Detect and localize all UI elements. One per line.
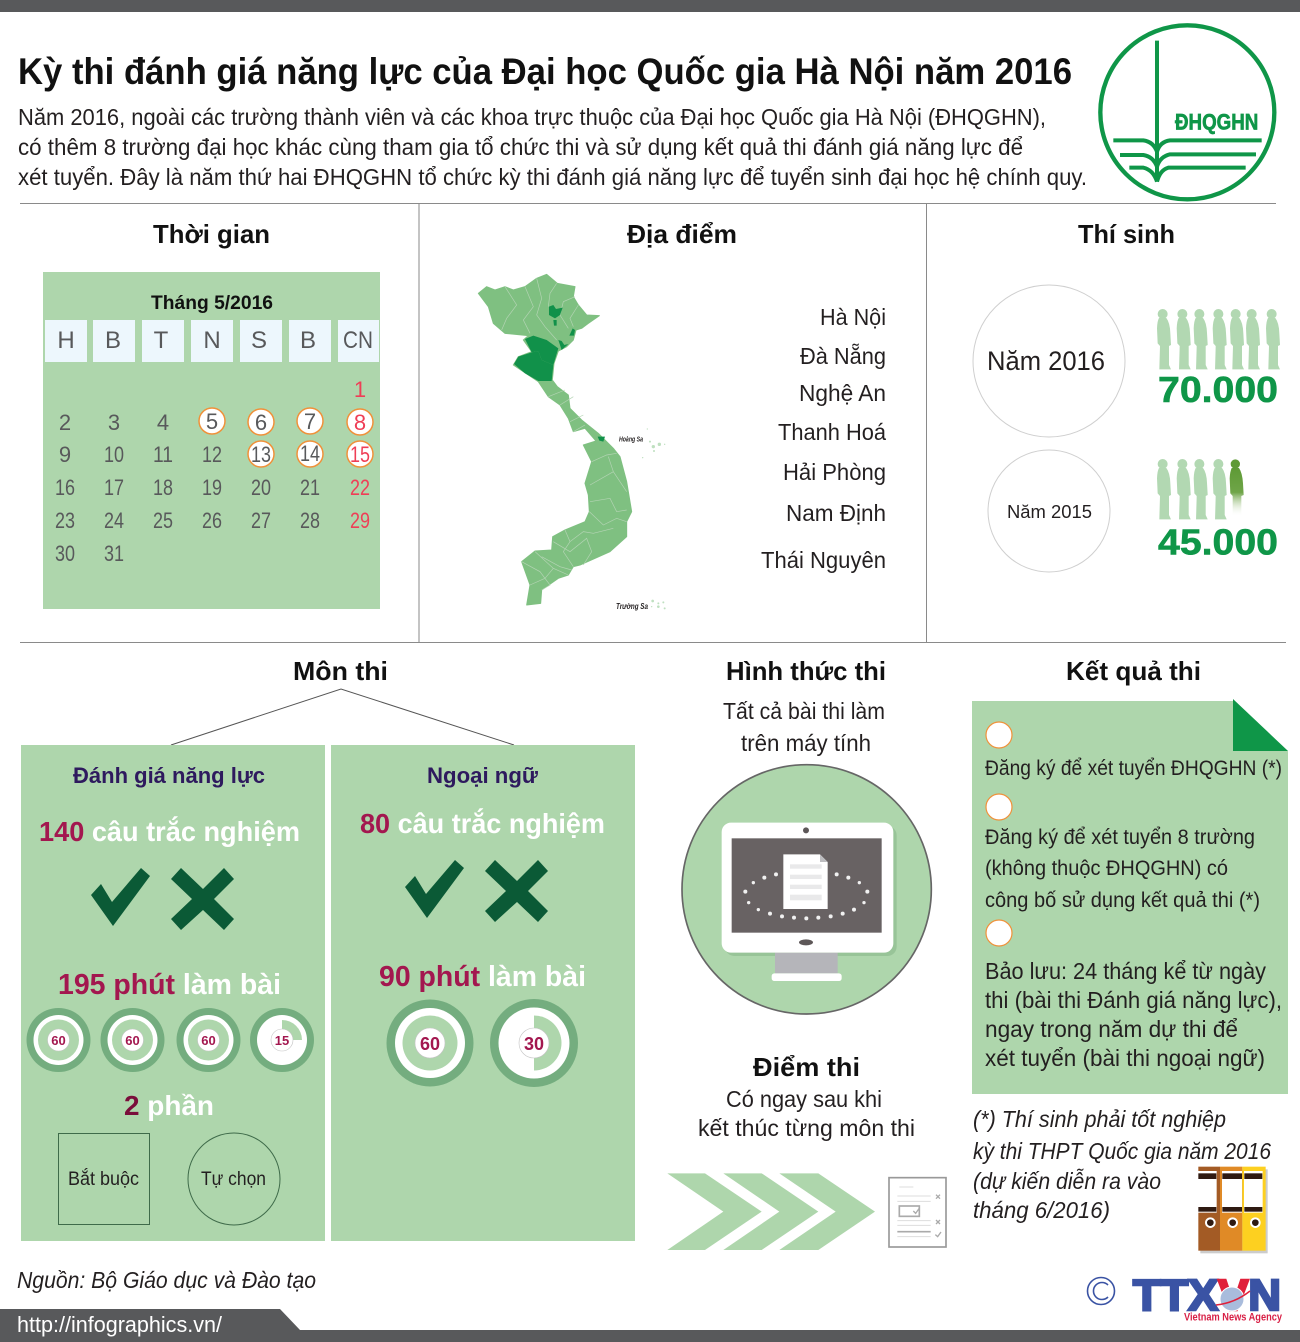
calendar: 21 bbox=[300, 475, 320, 500]
circle: year 2015 bbox=[988, 450, 1110, 572]
agency logo: TTXVN bbox=[1133, 1271, 1281, 1320]
circle: year 2016: Năm 2016 bbox=[987, 346, 1105, 376]
calendar: 1 bbox=[354, 377, 366, 402]
list of locations: Thái Nguyên bbox=[761, 547, 886, 573]
heading: candidates: Thí sinh bbox=[1078, 219, 1175, 249]
calendar: 4 bbox=[157, 410, 169, 435]
clock: 15 minutes: 15 bbox=[275, 1033, 289, 1048]
heading: results: Kết quả thi bbox=[1066, 656, 1201, 686]
calendar: 22 bbox=[350, 475, 370, 500]
footnote: kỳ thi THPT Quốc gia năm 2016 bbox=[973, 1138, 1271, 1164]
box: compulsory part bbox=[58, 1134, 150, 1224]
calendar: 5 bbox=[206, 409, 218, 434]
footnote: (dự kiến diễn ra vào bbox=[973, 1167, 1161, 1194]
results card: xét tuyển (bài thi ngoại ngữ) bbox=[985, 1045, 1265, 1071]
label: Hoang Sa: Hoàng Sa bbox=[619, 436, 643, 444]
icon: copyright bbox=[1088, 1278, 1114, 1304]
results card: ngay trong năm dự thi để bbox=[985, 1016, 1238, 1042]
calendar: 6 bbox=[255, 410, 267, 435]
calendar: 30 bbox=[55, 541, 75, 566]
panel: aptitude test bbox=[21, 745, 325, 1241]
list of locations: Nghệ An bbox=[799, 380, 886, 406]
results card: (không thuộc ĐHQGHN) có bbox=[985, 857, 1228, 880]
calendar: 10 bbox=[104, 442, 124, 467]
calendar: 17 bbox=[104, 475, 124, 500]
calendar: 2 bbox=[59, 410, 71, 435]
list of locations: Hải Phòng bbox=[783, 459, 886, 485]
calendar: 29 bbox=[350, 508, 370, 533]
heading: format: Hình thức thi bbox=[726, 656, 886, 686]
box: compulsory part: Bắt buộc bbox=[68, 1168, 139, 1190]
footer bar bbox=[0, 1309, 1300, 1342]
calendar: S bbox=[251, 327, 267, 354]
clock: 60 minutes: 60 bbox=[420, 1034, 440, 1054]
calendar: 15 bbox=[350, 442, 370, 467]
icon: university logo bbox=[1100, 25, 1274, 199]
list of locations: Nam Định bbox=[786, 500, 886, 526]
number: 45.000: 45.000 bbox=[1158, 522, 1278, 562]
calendar: 16 bbox=[55, 475, 75, 500]
calendar: 19 bbox=[202, 475, 222, 500]
results card: thi (bài thi Đánh giá năng lực), bbox=[985, 987, 1282, 1013]
results card: Đăng ký để xét tuyển 8 trường bbox=[985, 826, 1255, 849]
panel: candidates bbox=[973, 219, 1280, 572]
calendar: 3 bbox=[108, 410, 120, 435]
calendar: 20 bbox=[251, 475, 271, 500]
scores text: kết thúc từng môn thi bbox=[698, 1115, 915, 1141]
question count: 140 câu trắc nghiệm bbox=[39, 816, 300, 847]
agency logo: Vietnam News Agency bbox=[1184, 1312, 1283, 1324]
footer url: http://infographics.vn/ bbox=[17, 1312, 223, 1337]
scores text: Có ngay sau khi bbox=[726, 1086, 882, 1112]
icon: result sheet bbox=[889, 1178, 946, 1247]
calendar: CN bbox=[343, 327, 373, 354]
circle: optional part: Tự chọn bbox=[201, 1169, 266, 1190]
source note: Nguồn: Bộ Giáo dục và Đào tạo bbox=[17, 1267, 316, 1293]
calendar: B bbox=[300, 327, 316, 354]
calendar: 7 bbox=[304, 409, 316, 434]
intro paragraph: Năm 2016, ngoài các trường thành viên và các khoa trực thuộc của Đại học Quốc gia Hà Nội (ĐHQGHN), bbox=[18, 104, 1046, 130]
calendar: 18 bbox=[153, 475, 173, 500]
icon: university logo: ĐHQGHN bbox=[1175, 109, 1258, 134]
title: Kỳ thi đánh giá năng lực của Đại học Quốc gia Hà Nội năm 2016 bbox=[18, 51, 1072, 92]
calendar: 27 bbox=[251, 508, 271, 533]
icon: binders bbox=[1198, 1167, 1268, 1253]
calendar: Tháng 5/2016 bbox=[151, 293, 273, 314]
intro paragraph: xét tuyển. Đây là năm thứ hai ĐHQGHN tổ chức kỳ thi đánh giá năng lực để tuyển sinh đại học hệ chính quy. bbox=[18, 164, 1087, 190]
calendar: 25 bbox=[153, 508, 173, 533]
heading: locations: Địa điểm bbox=[627, 219, 737, 249]
icon row: 2015 candidates bbox=[1157, 459, 1244, 519]
subject title: Ngoại ngữ bbox=[427, 763, 538, 788]
top bar bbox=[0, 0, 1300, 12]
circle: year 2015: Năm 2015 bbox=[1007, 502, 1092, 522]
heading: scores: Điểm thi bbox=[753, 1052, 860, 1082]
footnote: (*) Thí sinh phải tốt nghiệp bbox=[973, 1106, 1226, 1132]
map of Vietnam bbox=[478, 274, 666, 609]
clock: 60 minutes bbox=[176, 1008, 240, 1072]
duration: 90 phút làm bài bbox=[379, 961, 586, 993]
calendar: 24 bbox=[104, 508, 124, 533]
panel: foreign language bbox=[331, 745, 635, 1241]
calendar: 26 bbox=[202, 508, 222, 533]
subject title: Đánh giá năng lực bbox=[73, 763, 265, 788]
clock: 60 minutes: 60 bbox=[51, 1033, 66, 1048]
panel: time bbox=[43, 219, 380, 609]
icon: check and cross bbox=[405, 860, 548, 922]
results card bbox=[972, 699, 1288, 1094]
calendar: B bbox=[105, 327, 121, 354]
icon: check and cross bbox=[91, 868, 234, 930]
footnote bbox=[973, 1106, 1271, 1223]
calendar: T bbox=[154, 327, 169, 354]
parts count: 2 phần bbox=[124, 1090, 214, 1121]
calendar: 13 bbox=[251, 442, 271, 467]
results card: Bảo lưu: 24 tháng kể từ ngày bbox=[985, 958, 1266, 984]
circle: year 2016 bbox=[973, 285, 1125, 437]
calendar: 14 bbox=[300, 441, 320, 466]
format text bbox=[723, 698, 885, 756]
list of locations bbox=[761, 304, 886, 573]
clock: 60 minutes bbox=[386, 1000, 474, 1086]
footnote: tháng 6/2016) bbox=[973, 1197, 1110, 1223]
panel: exam subjects bbox=[21, 656, 635, 1241]
clock: 60 minutes: 60 bbox=[201, 1033, 216, 1048]
icon row: 2016 candidates bbox=[1157, 309, 1280, 369]
results card: Đăng ký để xét tuyển ĐHQGHN (*) bbox=[985, 757, 1282, 780]
calendar: 12 bbox=[202, 442, 222, 467]
circle: optional part bbox=[188, 1133, 280, 1225]
list of locations: Hà Nội bbox=[820, 304, 886, 330]
calendar: H bbox=[57, 327, 75, 354]
clock: 30 minutes: 30 bbox=[524, 1034, 544, 1054]
calendar: 28 bbox=[300, 508, 320, 533]
duration: 195 phút làm bài bbox=[58, 969, 281, 1001]
clock: 30 minutes bbox=[490, 999, 578, 1087]
panel: exam format bbox=[667, 656, 946, 1250]
heading: subjects: Môn thi bbox=[293, 656, 388, 686]
intro paragraph bbox=[18, 104, 1087, 190]
question count: 80 câu trắc nghiệm bbox=[360, 808, 605, 839]
calendar: 9 bbox=[59, 442, 71, 467]
format text: trên máy tính bbox=[741, 730, 871, 756]
panel: exam results bbox=[972, 656, 1288, 1253]
clock: 15 minutes bbox=[250, 1008, 314, 1072]
clock: 60 minutes bbox=[100, 1008, 164, 1072]
arrow: chevrons bbox=[667, 1173, 875, 1250]
calendar: 8 bbox=[354, 410, 366, 435]
intro paragraph: có thêm 8 trường đại học khác cùng tham gia tổ chức thi và sử dụng kết quả thi đánh giá năng lực để bbox=[18, 134, 1023, 160]
clock: 60 minutes bbox=[26, 1008, 90, 1072]
list of locations: Đà Nẵng bbox=[800, 342, 886, 369]
panel: locations bbox=[478, 219, 886, 611]
icon: computer monitor bbox=[682, 765, 931, 1014]
list of locations: Thanh Hoá bbox=[778, 419, 886, 445]
label: Truong Sa: Trường Sa bbox=[616, 602, 648, 611]
calendar: 23 bbox=[55, 508, 75, 533]
results card: công bố sử dụng kết quả thi (*) bbox=[985, 889, 1260, 912]
calendar: N bbox=[203, 327, 221, 354]
calendar bbox=[43, 272, 380, 609]
clock: 60 minutes: 60 bbox=[125, 1033, 140, 1048]
calendar: 11 bbox=[153, 442, 173, 467]
number: 70.000: 70.000 bbox=[1158, 369, 1278, 410]
scores text bbox=[698, 1086, 915, 1141]
format text: Tất cả bài thi làm bbox=[723, 698, 885, 724]
calendar: 31 bbox=[104, 541, 124, 566]
heading: time: Thời gian bbox=[153, 219, 270, 249]
